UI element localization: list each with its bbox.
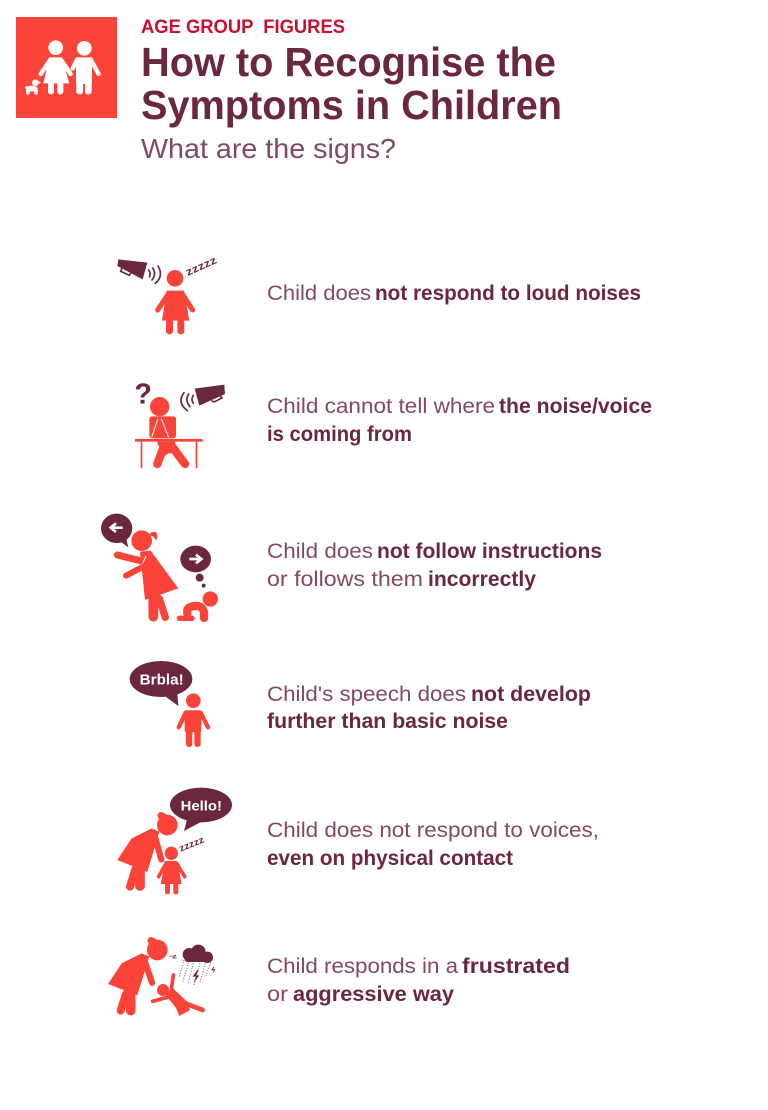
text: symptom 3: or follows them [267,568,423,591]
heading: section label: AGE GROUP FIGURES [141,17,345,38]
text: symptom 4: not develop [471,683,591,706]
text: symptom 6: frustrated [462,955,570,978]
text: symptom 3 [267,540,602,591]
icon: megaphone and sleeping girl: zzzzz [184,254,219,279]
text: symptom 2 [267,395,652,446]
icon: confused child at desk with megaphone: ? [134,378,152,410]
text: symptom 3: Child does [267,540,373,563]
text: symptom 5: even on physical contact [267,847,513,870]
icon: adult saying hello to sleeping child: zzzzz [178,834,206,854]
title [141,39,562,128]
icon: child babbling with speech bubble: Brbla! [140,672,184,688]
icon: child babbling with speech bubble [130,661,208,747]
text: symptom 6: aggressive way [293,983,454,1006]
text: symptom 6 [267,955,570,1006]
text: symptom 2: Child cannot tell where [267,395,495,418]
text: symptom 6: Child responds in a [267,955,458,978]
text: symptom 2: the noise/voice [499,395,652,418]
subtitle: What are the signs? [141,133,396,164]
text: symptom 4: Child's speech does [267,683,466,706]
icon: adult saying hello to sleeping child: Hello! [181,797,222,813]
text: symptom 5: Child does not respond to voices, [267,819,599,842]
title: How to Recognise the [141,39,556,85]
text: symptom 4 [267,683,591,733]
text: symptom 2: is coming from [267,423,412,446]
title: Symptoms in Children [141,82,562,128]
icon: adult saying hello to sleeping child [117,788,232,894]
icon: adult pointing and crawling baby [101,514,218,618]
icon: confused child at desk with megaphone [134,378,225,468]
icon: megaphone and sleeping girl [117,254,219,334]
text: symptom 3: not follow instructions [377,540,602,563]
text: symptom 1: not respond to loud noises [375,282,641,305]
text: symptom 6: or [267,983,288,1006]
text: symptom 5 [267,819,599,870]
icon: header children [16,17,117,118]
text: symptom 4: further than basic noise [267,710,508,733]
text: symptom 3: incorrectly [428,568,536,591]
text: symptom 1: Child does [267,282,371,305]
icon: adult and frustrated child with storm cloud [108,937,215,1016]
